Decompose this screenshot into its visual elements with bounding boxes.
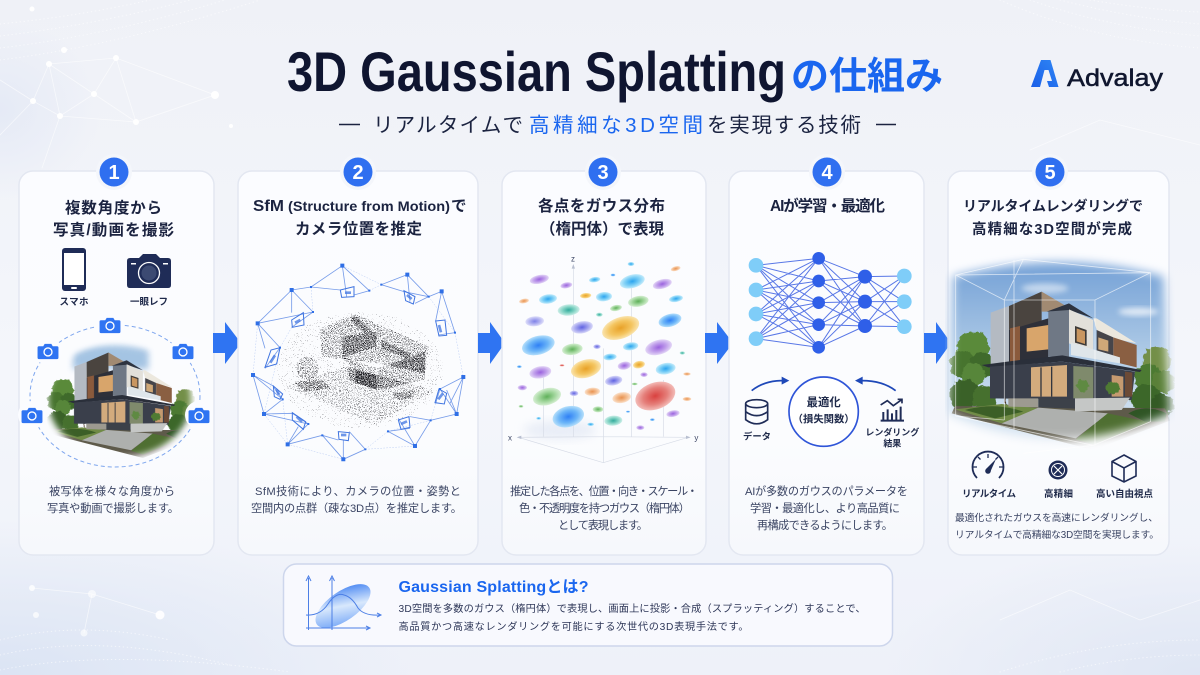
step 3 text: 推定した各点を、位置・向き・スケール・: [510, 484, 698, 498]
arrow 2: [478, 322, 505, 364]
title: 3D Gaussian Splatting: [287, 40, 786, 103]
subtitle: [339, 114, 896, 137]
step 1 heading: [53, 198, 174, 239]
axis labels: y: [694, 434, 698, 443]
arrow 3: [705, 322, 733, 364]
rendered house with wireframe: [945, 250, 1175, 457]
step 4 text: [745, 484, 908, 532]
optimization circle: 最適化: [807, 395, 841, 409]
point cloud: [277, 312, 443, 428]
step 3 text: 色・不透明度を持つガウス（楕円体）: [519, 501, 690, 515]
step 1 text: [47, 484, 179, 515]
icon: gauge, real-time: [962, 452, 1016, 500]
camera nodes: [251, 264, 465, 461]
arrowhead: [855, 377, 863, 385]
step number 1: [96, 154, 132, 190]
step 2 heading: [253, 198, 467, 238]
icon: free viewpoint cube: 高い自由視点: [1096, 488, 1153, 500]
network connections: [756, 258, 904, 347]
step 4 text: 学習・最適化し、より高品質に: [750, 501, 900, 515]
arrowhead: [782, 377, 789, 385]
icon: rendering result chart: [865, 399, 919, 449]
step 2 heading: SfM: [253, 198, 284, 215]
step 5 text: リアルタイムで高精細な3D空間を実現します。: [955, 528, 1159, 541]
step 4 text: AIが多数のガウスのパラメータを: [745, 484, 908, 498]
step 5 heading: 高精細な3D空間が完成: [972, 220, 1132, 238]
SfM point cloud and cameras: [251, 264, 465, 461]
arrow 4: [924, 322, 951, 364]
step 1 heading: 写真/動画を撮影: [53, 220, 174, 239]
panel: step 3: [502, 154, 706, 555]
step number 5: [1032, 154, 1068, 190]
gaussian ellipsoid scatter: [508, 255, 698, 463]
axis labels: x: [508, 434, 512, 443]
title: の仕組み: [791, 56, 943, 98]
step 2 heading: (Structure from Motion): [288, 198, 450, 214]
logo: Advalay: [1031, 60, 1163, 92]
icon: rendering result chart: レンダリング: [865, 426, 919, 437]
step 3 text: として表現します。: [558, 519, 648, 532]
neural network diagram: [743, 252, 919, 449]
step 4 heading: AIが学習・最適化: [770, 196, 885, 215]
icon: smartphone: スマホ: [60, 297, 89, 308]
step number 3: [585, 154, 621, 190]
icon: SLR camera: [127, 254, 171, 308]
icon: database: データ: [743, 430, 771, 441]
icon: smartphone: [60, 248, 89, 308]
ellipsoids: [517, 262, 691, 431]
optimization circle: （損失関数）: [793, 413, 855, 426]
step number 2: [340, 154, 376, 190]
icon: gaussian graph: [306, 576, 381, 636]
3D axes: [517, 264, 691, 463]
logo: Advalay: Advalay: [1067, 65, 1163, 92]
panel: step 2: [238, 154, 478, 555]
arrow: data to optimization: [752, 381, 785, 391]
step 2 text: [251, 484, 462, 515]
step number 1: 1: [108, 162, 120, 184]
explainer text: 3D空間を多数のガウス（楕円体）で表現し、画面上に投影・合成（スプラッティング）することで、: [398, 602, 866, 615]
axis labels: [508, 255, 698, 443]
icon: database: [743, 400, 771, 441]
explainer heading: Gaussian Splattingとは?: [398, 578, 588, 596]
subtitle: を実現する技術: [707, 114, 861, 137]
house photo: [47, 345, 197, 458]
panel: what is Gaussian Splatting: [284, 564, 892, 646]
step 2 heading: で: [451, 198, 467, 215]
step 2 text: 空間内の点群（疎な3D点）を推定します。: [251, 501, 462, 515]
step 2 heading: カメラ位置を推定: [295, 220, 422, 238]
panel: step 1: [18, 154, 214, 555]
step 5 text: [955, 511, 1159, 541]
step 5 heading: [963, 198, 1143, 238]
step number 3: 3: [597, 162, 609, 184]
icon: gauge, real-time: リアルタイム: [962, 488, 1016, 500]
step 3 text: [510, 484, 698, 532]
step number 5: 5: [1044, 162, 1056, 184]
step 3 heading: [538, 196, 665, 238]
step 4 text: 再構成できるようにします。: [757, 519, 893, 532]
arrow: result to optimization: [859, 381, 896, 391]
panel: step 4: [729, 154, 924, 555]
subtitle: 高精細な3D空間: [529, 114, 703, 137]
step 2 text: SfM技術により、カメラの位置・姿勢と: [255, 484, 461, 498]
explainer text: 高品質かつ高速なレンダリングを可能にする次世代の3D表現手法です。: [398, 620, 748, 633]
explainer text: [398, 602, 866, 633]
camera network: [253, 266, 463, 459]
step 1 text: 被写体を様々な角度から: [49, 484, 175, 498]
step 3 heading: （楕円体）で表現: [540, 219, 664, 238]
icon: rendering result chart: 結果: [883, 438, 901, 449]
panel: step 5: [945, 154, 1175, 555]
step 5 text: 最適化されたガウスを高速にレンダリングし、: [955, 511, 1158, 524]
icon: high detail: [1044, 460, 1073, 500]
icon: free viewpoint cube: [1096, 455, 1153, 500]
camera orbit illustration: [18, 311, 213, 467]
axis labels: z: [571, 255, 575, 264]
step number 4: [809, 154, 845, 190]
step 5 heading: リアルタイムレンダリングで: [963, 198, 1143, 214]
icon: SLR camera: 一眼レフ: [130, 297, 168, 308]
wireframe box: [956, 259, 1151, 453]
arrow 1: [213, 322, 241, 364]
step 3 heading: 各点をガウス分布: [538, 196, 665, 215]
step number 4: 4: [821, 162, 833, 184]
step 1 text: 写真や動画で撮影します。: [47, 501, 179, 515]
icon: high detail: 高精細: [1044, 488, 1073, 500]
optimization circle: [789, 377, 858, 446]
image frames: [265, 287, 447, 441]
step 1 heading: 複数角度から: [65, 198, 162, 217]
subtitle: リアルタイムで: [373, 114, 523, 137]
network nodes: [749, 258, 912, 346]
step number 2: 2: [352, 162, 364, 184]
